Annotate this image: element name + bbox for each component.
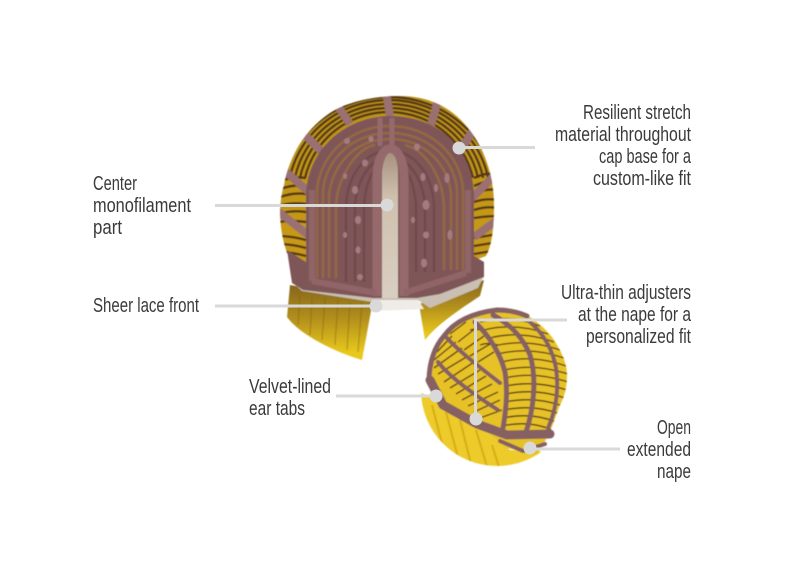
hair left of the neck — [287, 285, 373, 360]
callout: velvet-lined ear tabs — [249, 376, 442, 420]
neck lace fade — [372, 300, 424, 311]
hair right of the neck — [419, 280, 484, 340]
callout: ultra-thin adjusters: personalized fit — [586, 326, 691, 348]
inset dark wefts — [434, 319, 568, 430]
inset wig cap, three-quarter view — [418, 309, 568, 472]
callout: resilient stretch material: custom-like fit — [593, 168, 691, 190]
callout: ultra-thin adjusters: Ultra-thin adjusters — [561, 282, 691, 304]
white circle inset backdrop — [409, 304, 585, 480]
infographic: wig cap features — [94, 95, 691, 482]
callout: sheer lace front: Sheer lace front — [93, 295, 199, 317]
bottom seam — [312, 190, 468, 293]
callout: resilient stretch material — [452, 102, 692, 190]
callout: center monofilament part — [93, 173, 394, 239]
callout: open extended nape — [524, 417, 691, 483]
callout: ultra-thin adjusters — [470, 282, 692, 426]
callout: center monofilament part: monofilament — [93, 195, 191, 217]
callout: velvet-lined ear tabs: ear tabs — [249, 398, 305, 420]
sheer lace band and neck — [292, 276, 484, 308]
callout: ultra-thin adjusters: at the nape for a — [578, 304, 692, 326]
top centre seam — [380, 118, 392, 146]
ochre stripes showing through mesh — [317, 126, 463, 278]
callout: resilient stretch material: cap base for a — [599, 146, 692, 168]
callout: resilient stretch material: Resilient stretch — [583, 102, 691, 124]
lace part strip — [382, 153, 398, 298]
callout: center monofilament part: part — [93, 217, 122, 239]
callout: sheer lace front — [93, 295, 382, 317]
inset cap lining — [428, 309, 567, 455]
seam around the part — [377, 149, 404, 296]
stretch mesh inner panel — [287, 116, 484, 298]
callout: velvet-lined ear tabs: Velvet-lined — [249, 376, 331, 398]
callout: open extended nape: extended — [627, 439, 691, 461]
cap dome: yellow lining — [280, 96, 494, 262]
callout: center monofilament part: Center — [93, 173, 137, 195]
main wig cap, rear view — [275, 92, 500, 360]
callout: resilient stretch material: material throughout — [555, 124, 691, 146]
elastic straps on the dome — [275, 92, 500, 237]
knotted mesh dots — [343, 136, 452, 280]
dark wefts in the lining — [280, 95, 495, 258]
callout: open extended nape: nape — [657, 461, 691, 483]
darker mesh near the part — [346, 150, 434, 282]
callout: open extended nape: Open — [657, 417, 691, 439]
inset mauve bands — [429, 310, 557, 451]
inset hair — [420, 392, 542, 467]
